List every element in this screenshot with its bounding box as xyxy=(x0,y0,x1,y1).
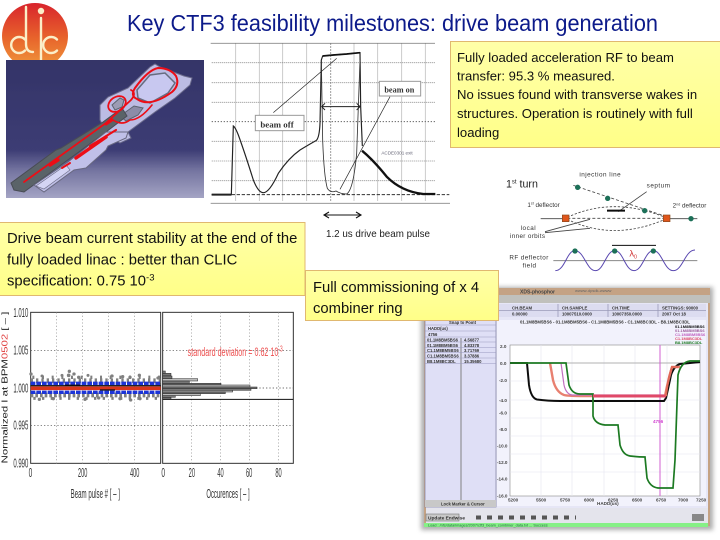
screenshot: XDS phosphor signal window: 10007350.0000 xyxy=(612,312,642,316)
signal plot: -4.0 xyxy=(499,398,507,403)
screenshot: XDS phosphor signal window: CH.BEAM xyxy=(512,305,532,310)
annotation: standard deviation: standard deviation = 0.62 10 xyxy=(188,345,339,359)
toolbar: Load : /nfs/data/images/2007/ctf3_beam_combiner_data.txt ... Success xyxy=(428,523,548,527)
callout: RF to beam transfer: No issues found with transverse wakes in xyxy=(457,87,697,102)
combiner ring injection diagram: 1 xyxy=(527,202,531,209)
screenshot: XDS phosphor signal window: 2007 Oct 18 xyxy=(662,312,686,316)
signal plot: 2.0 xyxy=(500,344,507,349)
heading: 1st turn: turn xyxy=(517,178,538,190)
axis tick labels: 1.010 xyxy=(13,306,28,320)
screenshot: XDS phosphor signal window xyxy=(424,288,710,527)
callout: RF to beam transfer: transfer: 95.3 % measured. xyxy=(457,68,615,84)
signal plot: 4756 xyxy=(653,419,664,424)
signal plot: -12.0 xyxy=(497,460,508,465)
screenshot: XDS phosphor signal window: CH.SAMPLE xyxy=(562,305,587,310)
callout: current stability: Drive beam current stability at the end of the xyxy=(7,231,297,247)
signal list side panel: 3.37886 xyxy=(464,354,480,358)
caption: pulse length: 1.2 us drive beam pulse xyxy=(326,228,430,240)
oscilloscope trace: beam on and beam off xyxy=(211,43,450,203)
screenshot: XDS phosphor signal window: XDS-phosphor xyxy=(520,290,555,296)
screenshot: XDS phosphor signal window: 10007510.0000 xyxy=(562,312,592,316)
axis tick labels: 1.000 xyxy=(13,381,28,395)
label: beam on xyxy=(379,81,421,96)
signal plot: -16.0 xyxy=(497,494,508,498)
signal list side panel: 01.1M8BM5BS6 xyxy=(427,343,459,348)
combiner ring injection diagram: 0 xyxy=(634,255,637,261)
signal plot: 5750 xyxy=(560,498,571,502)
heading: 1st turn: 1 xyxy=(506,178,512,190)
signal plot: 6500 xyxy=(632,498,643,502)
klystron gallery xyxy=(34,132,128,192)
title: Key CTF3 feasibility milestones: drive beam generation xyxy=(127,10,658,36)
callout: combiner ring commissioning: combiner ring xyxy=(313,301,403,317)
callout: combiner ring commissioning: Full commissioning of x 4 xyxy=(313,280,479,296)
toolbar: Update Endwise xyxy=(428,516,465,522)
beam on curve xyxy=(321,60,360,194)
screenshot shadow xyxy=(421,287,713,530)
signal plot: -14.0 xyxy=(497,476,508,482)
signal list side panel: 01.1M8BM5BS6 xyxy=(427,338,459,342)
signal list side panel: 15.35680 xyxy=(464,359,482,364)
toolbar xyxy=(424,508,708,527)
signal plot: -6.0 xyxy=(499,410,507,416)
combiner ring injection diagram: inner orbits xyxy=(510,233,545,240)
signal plot: 01.1M8BM5BS6 xyxy=(675,324,705,329)
combiner ring injection diagram: injection line xyxy=(579,172,621,179)
callout: combiner ring commissioning xyxy=(306,270,498,320)
screenshot: XDS phosphor signal window: CH.TIME xyxy=(612,305,630,310)
signal list side panel: 4.83378 xyxy=(464,343,480,348)
axis tick labels: 60 xyxy=(246,466,252,480)
callout: current stability xyxy=(0,222,305,296)
signal plot: 01.1M8BM5BS6 - 01.1M8BM5BS6 - C1.1M8BM5BS6 - C1.1M8BC3DL - B8.1M8BC3DL xyxy=(520,320,690,324)
axis tick labels: 20 xyxy=(189,466,195,480)
beam line in red xyxy=(24,68,177,182)
callout: current stability: -3 xyxy=(146,272,154,284)
axis tick labels: Beam pulse # [ – ] xyxy=(71,487,120,501)
signal plot: 6750 xyxy=(656,498,667,502)
signal list side panel: 4.56877 xyxy=(464,338,480,342)
combiner ring injection diagram: field xyxy=(523,262,536,269)
screenshot: XDS phosphor signal window: SETTINGS: 90000 xyxy=(662,305,699,310)
icon: CLIC logo xyxy=(2,3,68,69)
axis tick labels: 200 xyxy=(78,466,87,480)
signal plot: C1.1M8BC3DL xyxy=(675,336,703,341)
combiner ring injection diagram: deflector xyxy=(680,203,706,210)
callout: current stability: fully loaded linac : better than CLIC xyxy=(7,252,238,268)
callout: RF to beam transfer: loading xyxy=(457,125,499,140)
callout: current stability: specification: 0.75 10 xyxy=(7,274,146,290)
label: beam off: beam off xyxy=(260,120,294,130)
right panel: occurrence histogram xyxy=(163,312,293,463)
screenshot: XDS phosphor signal window: wwww-dpsdk-wwww xyxy=(575,288,612,293)
left panel: pulse scatter xyxy=(29,312,161,463)
signal plot: 0.0 xyxy=(500,361,507,366)
axis tick labels: 40 xyxy=(217,466,224,480)
y axis label: Normalized I at BPM0502 [ – ] xyxy=(0,312,9,463)
label: beam on: beam on xyxy=(384,84,414,94)
axis tick labels: 0.990 xyxy=(13,457,28,471)
screenshot: XDS phosphor signal window: 0.00000 xyxy=(512,312,528,316)
combiner ring injection diagram: local xyxy=(521,225,536,232)
signal plot: 5500 xyxy=(536,498,547,502)
chart: normalized beam current stability: 80 xyxy=(275,466,282,480)
callout: RF to beam transfer xyxy=(450,42,720,148)
decay tail xyxy=(362,151,435,194)
drive beam linac tunnel xyxy=(11,108,127,192)
signal plot: 6000 xyxy=(584,498,595,502)
axis tick labels: 0.995 xyxy=(13,419,28,433)
annotation: standard deviation: -3 xyxy=(278,344,283,353)
signal plot: 5200 xyxy=(508,498,519,502)
arrows xyxy=(273,58,390,189)
combiner ring injection diagram: 2 xyxy=(673,203,676,210)
signal list side panel: 4756 xyxy=(428,332,438,337)
chart: normalized beam current stability xyxy=(0,306,293,501)
combiner ring injection diagram: septum xyxy=(647,182,670,189)
arrow: pulse length xyxy=(324,212,361,218)
axis tick labels: 1.005 xyxy=(13,344,28,358)
label: beam off xyxy=(255,115,304,131)
signal list side panel: Snap to Point xyxy=(449,320,477,325)
oscilloscope trace: beam on and beam off: ACDE0301 exit xyxy=(381,151,413,156)
beam off curve xyxy=(212,53,362,195)
signal plot xyxy=(497,320,707,506)
upper combiner hall xyxy=(100,64,192,143)
callout: RF to beam transfer: Fully loaded acceleration RF to beam xyxy=(457,50,674,65)
signal list side panel: 3.71769 xyxy=(464,348,480,353)
callout: RF to beam transfer: structures. Operation is routinely with full xyxy=(457,106,693,121)
signal list side panel xyxy=(425,320,496,507)
axis tick labels: Occurences [ – ] xyxy=(206,487,250,501)
signal list side panel: Lock Marker & Cursor xyxy=(441,502,485,506)
signal list side panel: HADD(us) xyxy=(428,326,448,331)
signal plot: -2.0 xyxy=(499,378,507,383)
combiner ring injection diagram: λ xyxy=(629,249,634,259)
axis tick labels: 0 xyxy=(161,466,165,480)
signal plot: 7000 xyxy=(678,498,689,502)
signal plot: B8.1M8BC3DL xyxy=(675,340,703,345)
signal plot: -10.0 xyxy=(497,444,508,448)
signal plot: 7250 xyxy=(696,498,707,502)
signal list side panel: C1.1M8BM5BS6 xyxy=(427,354,459,358)
signal plot: -8.0 xyxy=(499,427,507,432)
signal plot: 6250 xyxy=(608,498,619,502)
signal list side panel: C1.1M8BM5BS6 xyxy=(427,348,459,353)
axis tick labels: 0 xyxy=(29,466,32,480)
signal list side panel: B8.1M8BC3DL xyxy=(427,359,456,364)
signal plot: 01.1M8BM5BS6 xyxy=(675,328,705,333)
heading: 1st turn: st xyxy=(512,179,517,185)
combiner ring injection diagram: RF deflector xyxy=(509,254,548,261)
axis tick labels: 400 xyxy=(130,466,139,480)
combiner ring injection diagram: nd xyxy=(676,202,680,206)
signal plot: HADD(us) xyxy=(597,501,619,506)
combiner ring injection diagram: st xyxy=(531,202,534,206)
axis tick labels xyxy=(13,306,282,501)
signal plot: C1.1M8BM5BS6 xyxy=(675,332,706,337)
combiner ring injection diagram: deflector xyxy=(534,202,560,209)
combiner ring injection diagram xyxy=(506,172,706,271)
3D CAD layout of CTF3 xyxy=(6,60,204,198)
